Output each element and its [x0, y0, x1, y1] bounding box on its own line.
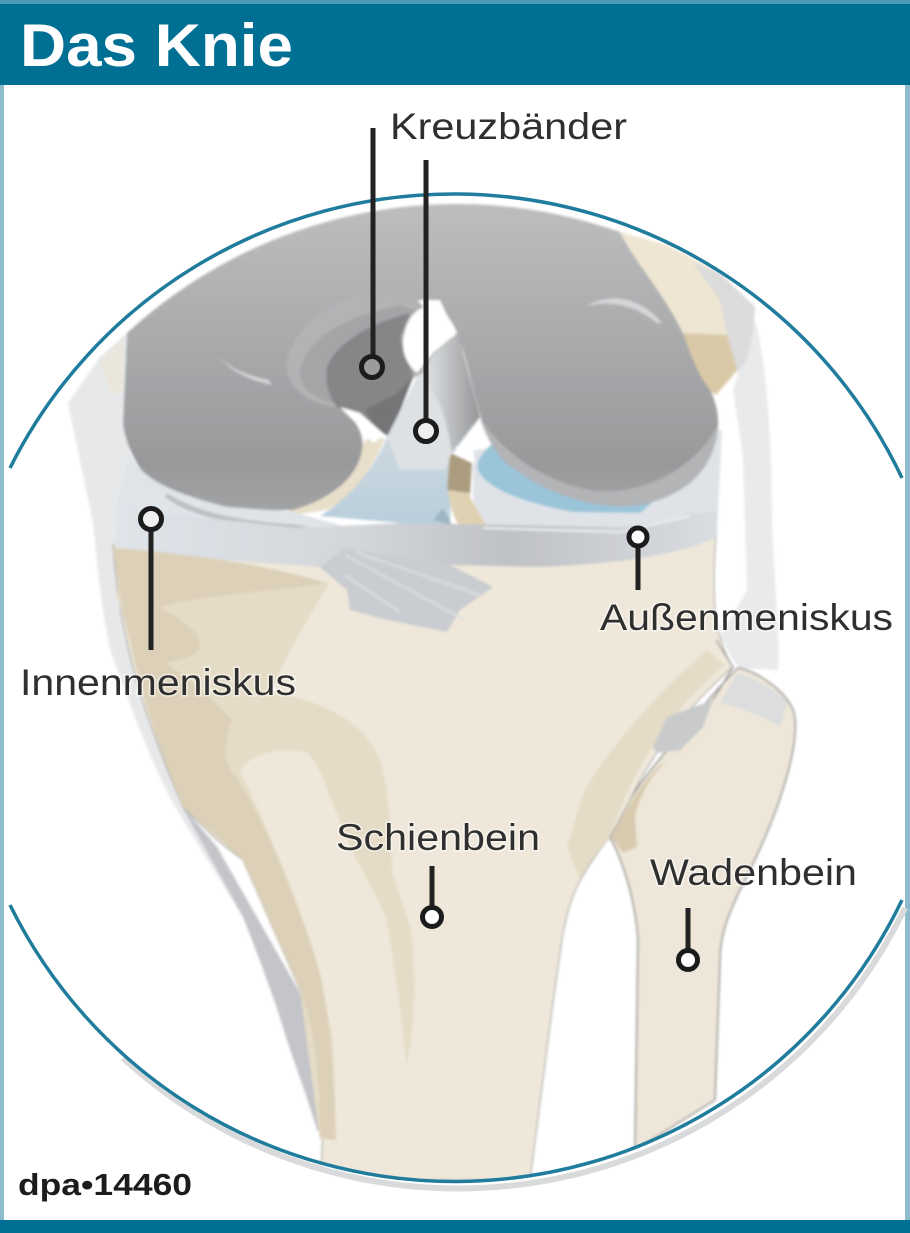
lateral meniscus base: [473, 430, 722, 535]
femur: [123, 204, 718, 510]
leader dots: [140, 356, 698, 970]
anterior cruciate ligament: [320, 373, 470, 526]
lateral meniscus blue: [476, 444, 652, 514]
credit: dpa•14460: [18, 1167, 192, 1202]
labels: Innenmeniskus: [20, 662, 296, 703]
tibiofibular outline: [713, 640, 733, 700]
circular frame: [10, 194, 905, 1188]
patella: [620, 232, 738, 395]
knee illustration: [68, 204, 795, 1180]
beige strip: [448, 489, 486, 526]
header bar: [0, 4, 910, 85]
fibula: [610, 668, 795, 1150]
labels: [20, 106, 893, 893]
bottom bar: [0, 1220, 910, 1233]
white gap: [455, 446, 476, 464]
title: Das Knie: [20, 12, 293, 79]
labels: Kreuzbänder: [390, 106, 627, 147]
trochlea: [286, 296, 451, 408]
beige rim, medial: [285, 438, 385, 516]
anterior ligament top: [386, 410, 452, 470]
outer ligament, right: [720, 320, 778, 670]
white hole lower: [340, 407, 385, 443]
condyle highlights: [218, 298, 662, 385]
leader lines: [151, 128, 688, 950]
front band: [131, 514, 717, 568]
labels: Außenmeniskus: [600, 597, 893, 638]
tibia: [113, 535, 733, 1180]
labels: Schienbein: [336, 817, 540, 858]
medial meniscus: [115, 453, 340, 547]
labels: Wadenbein: [650, 852, 857, 893]
posterior cruciate ligament: [420, 333, 480, 452]
outer ligament, left: [68, 334, 232, 897]
ligament fan: [322, 549, 488, 614]
femur rim: [480, 417, 718, 506]
notch: [326, 313, 413, 437]
tibia shading: [115, 583, 414, 1140]
white hole upper: [403, 307, 457, 373]
